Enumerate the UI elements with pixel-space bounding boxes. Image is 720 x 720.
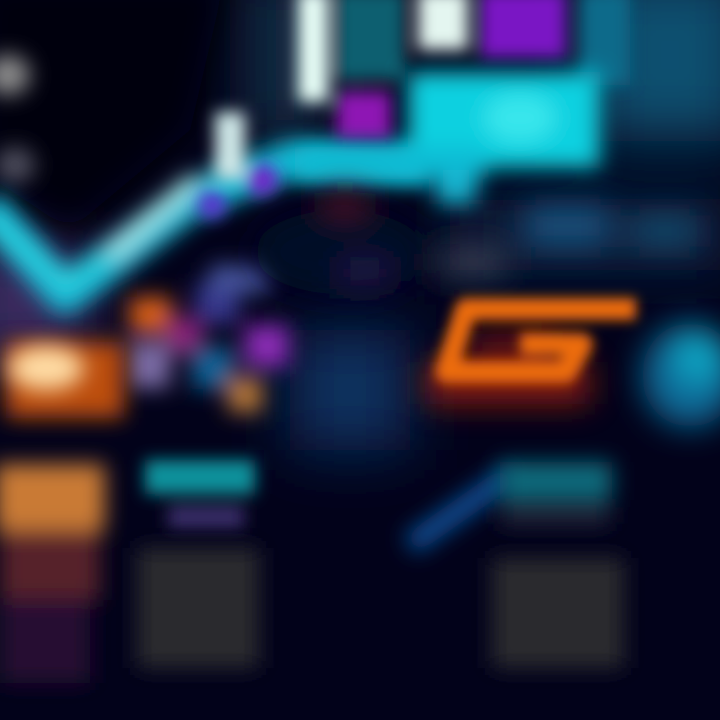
column: white streak [298, 0, 328, 102]
column: magenta block [480, 0, 566, 58]
label bar: teal left [145, 460, 255, 528]
panel: top right teal haze [0, 0, 720, 450]
icon: gray dots at left [0, 55, 35, 183]
panel: bright cyan block [295, 72, 600, 204]
panel: top left dark sky [0, 0, 225, 230]
text block: gray left [137, 548, 259, 668]
icon: orange card left [6, 342, 124, 418]
column: white top [418, 0, 468, 50]
icon: G shadow glow [425, 332, 590, 404]
text block: gray right [492, 558, 624, 668]
column: purple block [337, 92, 391, 140]
column: teal block [335, 0, 405, 80]
dots: purple markers [198, 112, 278, 219]
column: teal top right [580, 0, 630, 85]
chart line: cyan zigzag [0, 160, 430, 295]
icon: orange G shape [446, 309, 636, 372]
panel: dark blue header shapes [255, 192, 700, 294]
cluster: mosaic of pixels [128, 265, 289, 412]
top columns [298, 0, 630, 140]
bar: orange left column [0, 464, 105, 683]
swoosh: blue arrow [410, 475, 510, 545]
label bar: teal right [500, 462, 612, 524]
icon: teal circle [642, 323, 720, 427]
